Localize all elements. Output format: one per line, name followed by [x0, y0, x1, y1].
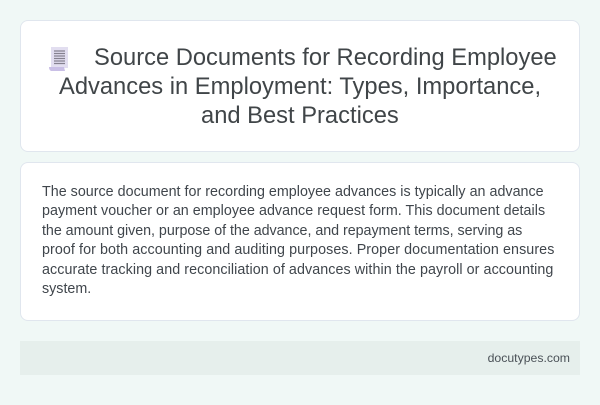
description text: accurate tracking and reconciliation of advances within the payroll or accounting	[42, 262, 553, 278]
title	[59, 45, 557, 129]
title: Advances in Employment: Types, Importance,	[59, 74, 541, 100]
description text	[42, 184, 554, 297]
description text: system.	[42, 281, 91, 297]
title: Source Documents for Recording Employee	[94, 45, 557, 71]
panel: title card	[20, 20, 580, 152]
footer source label: docutypes.com	[488, 351, 570, 365]
footer bar	[20, 341, 580, 375]
title: and Best Practices	[201, 103, 399, 129]
icon: document scroll	[49, 47, 68, 71]
description text: proof for both accounting and auditing purposes. Proper documentation ensures	[42, 242, 554, 258]
description text: The source document for recording employee advances is typically an advance	[42, 184, 544, 200]
description text: the amount given, purpose of the advance, and repayment terms, serving as	[42, 223, 522, 239]
panel: description card	[20, 162, 580, 321]
description text: payment voucher or an employee advance request form. This document details	[42, 203, 545, 219]
